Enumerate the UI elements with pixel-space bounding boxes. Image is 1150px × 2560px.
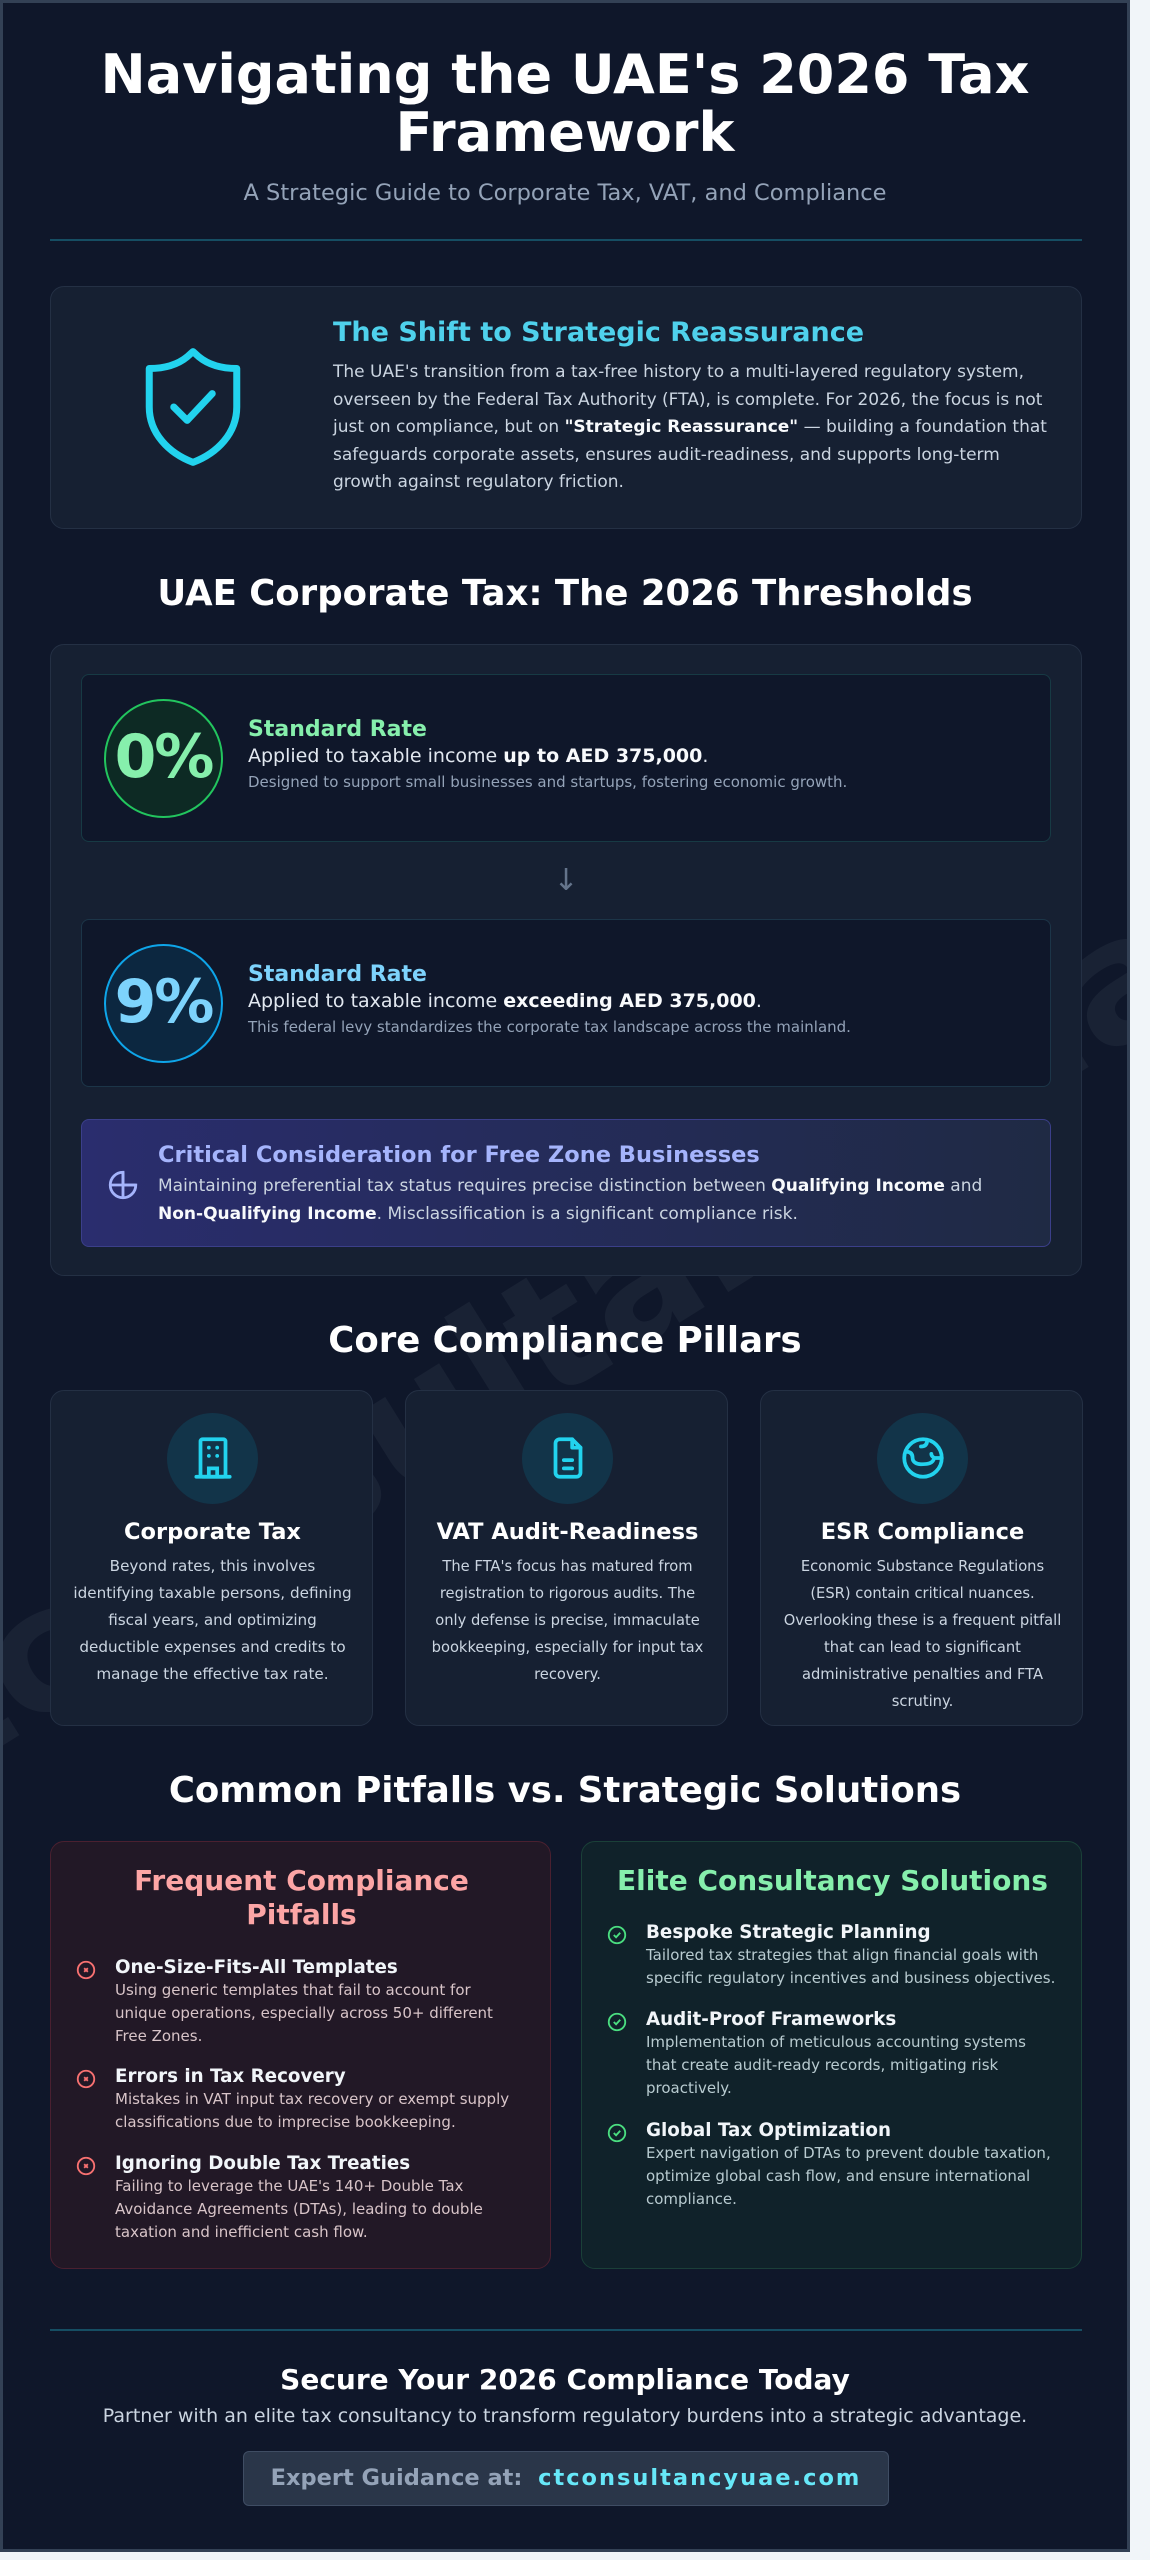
icon: shield: [146, 348, 240, 466]
text: 9% details: Applied to taxable income exceeding AED 375,000.: [248, 990, 762, 1012]
text: 9% details: Standard Rate: [248, 962, 427, 987]
text: VAT: The FTA's focus has matured from registration to rigorous audits. The only defense is precise, immaculate bookkeeping, especially for input tax recovery.: [432, 1558, 703, 1683]
item: tax recovery: Mistakes in VAT input tax recovery or exempt supply classifications due to imprecise bookkeeping.: [115, 2090, 509, 2131]
icon: 9% circle: 9%: [115, 967, 212, 1037]
arrow: ↓: [553, 863, 579, 898]
panel: pillar VAT: [405, 1390, 728, 1726]
title: Navigating the UAE's 2026 Tax: [101, 43, 1029, 106]
heading: pitfalls: [134, 1864, 469, 1931]
item: templates: [76, 1957, 493, 2045]
text: 9% details: This federal levy standardizes the corporate tax landscape across the mainland.: [248, 1018, 851, 1036]
heading: cta: Secure Your 2026 Compliance Today: [280, 2363, 850, 2396]
text: cta: Partner with an elite tax consultancy to transform regulatory burdens into a strategic advantage.: [103, 2405, 1027, 2427]
text: 9% details: [248, 962, 851, 1036]
heading: pitfalls: Frequent Compliance: [134, 1864, 469, 1897]
item: treaties: Ignoring Double Tax Treaties: [115, 2153, 410, 2174]
text: ESR: Economic Substance Regulations (ESR) contain critical nuances. Overlooking these is a frequent pitfall that can lead to significant administrative penalties and FTA scrutiny.: [784, 1558, 1061, 1710]
text: 0% details: Applied to taxable income up to AED 375,000.: [248, 745, 708, 767]
heading: pitfalls: Pitfalls: [246, 1898, 357, 1931]
item: audit-proof: Audit-Proof Frameworks: [646, 2009, 896, 2030]
title: Framework: [396, 101, 734, 164]
button: url: Expert Guidance at: ctconsultancyuae.com: [271, 2465, 861, 2491]
icon: globe: [877, 1413, 968, 1504]
item: treaties: Failing to leverage the UAE's 140+ Double Tax Avoidance Agreements (DTAs), leading to double taxation and inefficient cash flow.: [115, 2177, 483, 2241]
icon: document: [522, 1413, 613, 1504]
heading: pitfalls vs solutions: Common Pitfalls vs. Strategic Solutions: [169, 1770, 961, 1811]
heading: solutions: Elite Consultancy Solutions: [617, 1864, 1048, 1897]
panel: thresholds: [50, 644, 1082, 1276]
panel: pitfalls: [50, 1841, 551, 2269]
heading: pillars: Core Compliance Pillars: [328, 1320, 802, 1361]
item: bespoke: Bespoke Strategic Planning: [646, 1922, 931, 1943]
panel: intro: [50, 286, 1082, 529]
item: treaties: [76, 2153, 483, 2241]
icon: pie: [108, 1170, 138, 1200]
item: global: [608, 2120, 1051, 2208]
item: bespoke: [608, 1922, 1055, 1987]
button: url: [243, 2451, 889, 2506]
panel: solutions: [581, 1841, 1082, 2269]
item: global: Expert navigation of DTAs to prevent double taxation, optimize global cash flow, and ensure international compliance.: [646, 2144, 1051, 2208]
item: tax recovery: Errors in Tax Recovery: [115, 2066, 346, 2087]
text: 0% details: Designed to support small businesses and startups, fostering economic growth.: [248, 773, 847, 791]
panel: pillar corporate tax: [50, 1390, 373, 1726]
item: bespoke: Tailored tax strategies that align financial goals with specific regulatory incentives and business objectives.: [646, 1946, 1055, 1987]
card: 9% rate: [81, 919, 1051, 1087]
subtitle: A Strategic Guide to Corporate Tax, VAT, and Compliance: [244, 180, 886, 206]
item: templates: One-Size-Fits-All Templates: [115, 1957, 398, 1978]
text: corporate tax: Beyond rates, this involves identifying taxable persons, defining fiscal years, and optimizing deductible expenses and credits to manage the effective tax rate.: [73, 1557, 352, 1683]
text: 0% details: [248, 717, 847, 791]
callout: free zone: [81, 1119, 1051, 1247]
title: [101, 43, 1029, 164]
text: free zone body: Maintaining preferential tax status requires precise distinction between Qualifying Income and Non-Qualifying Income. Misclassification is a significant compliance risk.: [158, 1176, 982, 1224]
item: tax recovery: [76, 2066, 509, 2131]
icon: building: [167, 1413, 258, 1504]
panel: pillar ESR: [760, 1390, 1083, 1726]
icon: 9% circle: [104, 944, 223, 1063]
icon: 0% circle: [104, 699, 223, 818]
icon: 0% circle: 0%: [115, 722, 212, 792]
text: corporate tax: Corporate Tax: [124, 1519, 301, 1545]
text: ESR: ESR Compliance: [821, 1519, 1024, 1545]
card: 0% rate: [81, 674, 1051, 842]
item: audit-proof: Implementation of meticulous accounting systems that create audit-ready records, mitigating risk proactively.: [646, 2033, 1026, 2097]
heading: free zone: Critical Consideration for Free Zone Businesses: [158, 1142, 760, 1168]
text: VAT: VAT Audit-Readiness: [437, 1519, 698, 1545]
item: audit-proof: [608, 2009, 1026, 2097]
item: templates: Using generic templates that fail to account for unique operations, especially across 50+ different Free Zones.: [115, 1981, 493, 2045]
item: global: Global Tax Optimization: [646, 2120, 891, 2141]
text: intro body: The UAE's transition from a tax-free history to a multi-layered regulatory system, overseen by the Federal Tax Authority (FTA), is complete. For 2026, the focus is not just on compliance, but on "Strategic Reassurance" — building a foundation that safeguards corporate assets, ensures audit-readiness, and supports long-term growth against regulatory friction.: [333, 362, 1047, 492]
text: 0% details: Standard Rate: [248, 717, 427, 742]
heading: thresholds: UAE Corporate Tax: The 2026 Thresholds: [157, 573, 973, 614]
heading: shift: The Shift to Strategic Reassurance: [333, 317, 864, 348]
